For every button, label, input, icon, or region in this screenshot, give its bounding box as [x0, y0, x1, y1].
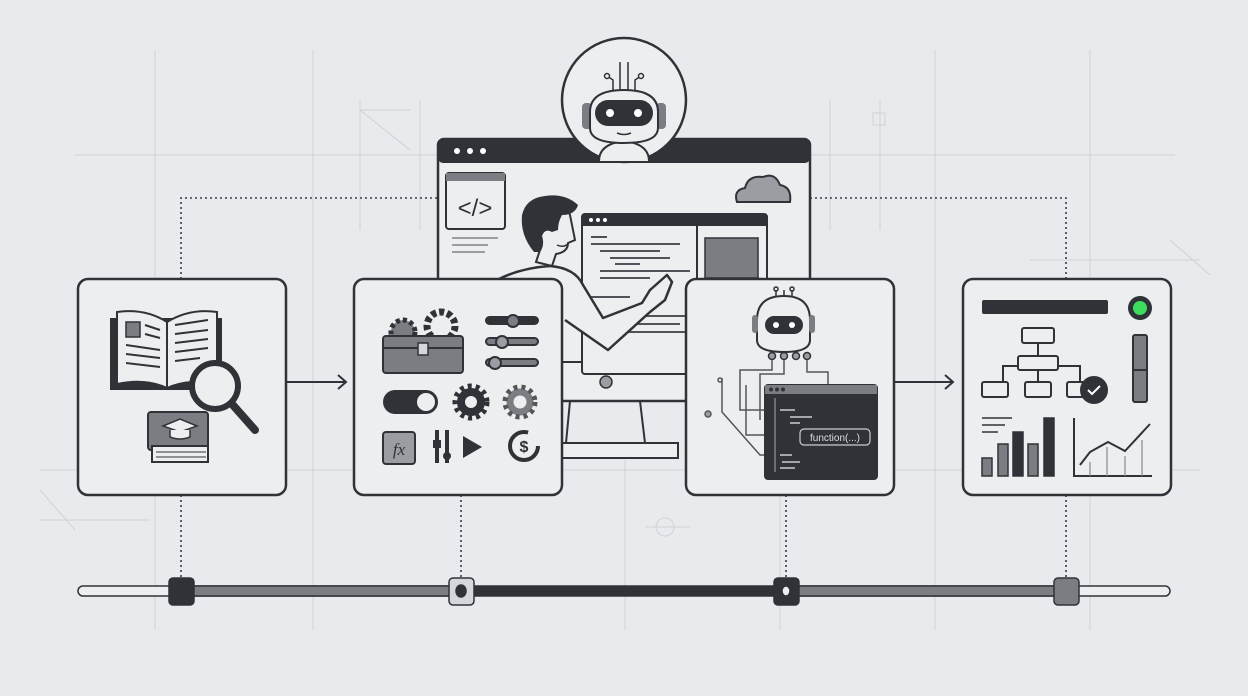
robot avatar circle: [562, 38, 686, 162]
code window: </>: [458, 195, 492, 222]
panel 3: AI agent: [686, 279, 894, 495]
person: [497, 195, 672, 350]
icon: open book: [110, 311, 222, 390]
level gauge: [1133, 335, 1147, 402]
panel 4: results dashboard: [963, 279, 1171, 495]
status light: [1128, 296, 1152, 320]
icon: fx: fx: [393, 440, 406, 459]
panel 1: research: [78, 279, 286, 495]
icon: robot: [705, 287, 828, 455]
icon: magnifier: [192, 363, 255, 430]
icon: gears: [455, 386, 535, 418]
icon: graduation book: [148, 412, 208, 462]
arrow 1: [286, 375, 346, 389]
inner window: [582, 214, 767, 374]
title bar: [982, 300, 1108, 314]
icon: toggle: [383, 390, 438, 414]
code window: [446, 173, 505, 252]
code editor: [765, 385, 877, 479]
panel 2: tools: [354, 279, 562, 495]
icon: sliders: [486, 315, 538, 369]
line chart: [1074, 418, 1152, 476]
arrow 2: [894, 375, 953, 389]
icon: faders, cursor, dollar: [433, 430, 538, 463]
cloud: [736, 176, 790, 202]
icon: faders, cursor, dollar: $: [520, 439, 529, 456]
bar chart: [982, 418, 1054, 476]
monitor: [438, 139, 810, 458]
milestone markers: [169, 578, 1079, 605]
icon: fx: [383, 432, 415, 464]
timeline: [78, 578, 1170, 605]
flowchart: [982, 328, 1107, 403]
dotted connectors: [181, 195, 1066, 580]
code editor: function(...): [810, 433, 860, 444]
icon: toolbox with gears: [383, 312, 463, 373]
